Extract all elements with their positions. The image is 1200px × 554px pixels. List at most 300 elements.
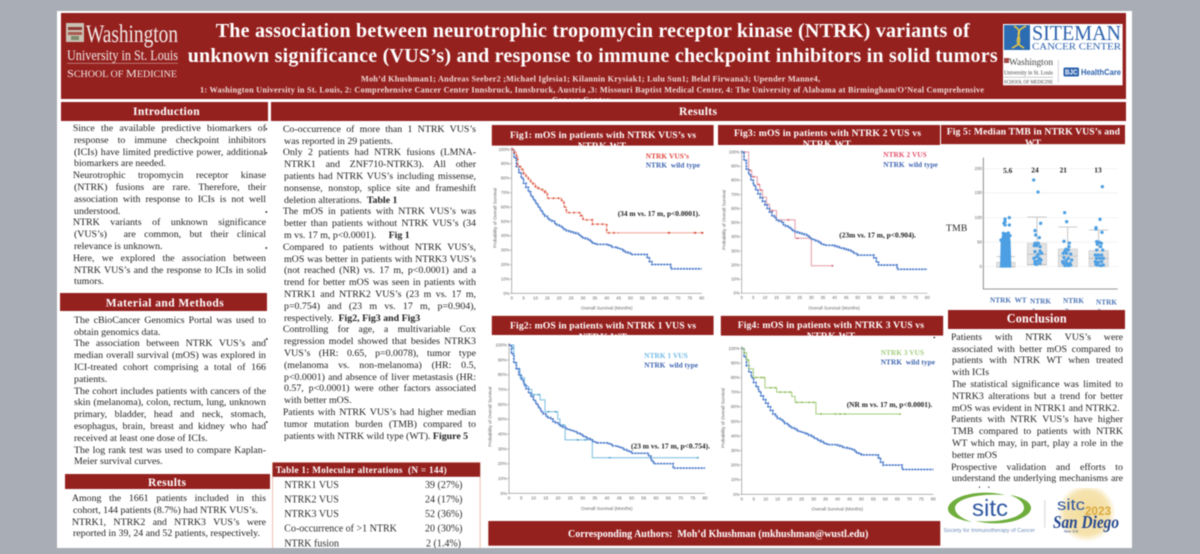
legend: Fig 1: NTRK VUS’s [646, 152, 689, 160]
text block: results detail: Controlling for age, a multivariable Cox [283, 324, 476, 335]
chart: Kaplan-Meier Fig 1: 70% [501, 190, 510, 195]
logo: Siteman Cancer Center: University in St. Louis [1004, 70, 1053, 76]
text block: conclusion: WT which may, in part, play a role in the [952, 438, 1123, 449]
logo: Washington University School of Medicine: SCHOOL OF MEDICINE [67, 68, 178, 80]
text block: introduction: relevance is unknown. [74, 241, 163, 252]
chart: Kaplan-Meier Fig 2: 45 [617, 496, 622, 500]
text block: results detail: was reported in 29 patients. [284, 136, 393, 147]
heading: Fig 3: Fig3: mOS in patients with NTRK 2 VUS vs [734, 128, 921, 139]
text block: conclusion: understand the underlying mechanisms are [952, 473, 1123, 484]
chart: Kaplan-Meier Fig 3: 45 [844, 295, 849, 300]
text block: introduction: Neurotrophic tropomycin receptor kinase [73, 170, 266, 181]
chart: Kaplan-Meier Fig 2: 50 [629, 496, 635, 500]
chart: Kaplan-Meier Fig 2: 10% [498, 476, 507, 481]
text block: introduction: Since the available predictive biomarkers of [73, 123, 266, 134]
authors and affiliations: Moh’d Khushman1; Andreas Seeber2 ;Michael Iglesia1; Kilannin Krysiak1; Lulu Sun1; Belal Firwana3; Upender Manne4, [361, 75, 820, 84]
legend: Fig 2: NTRK 1 VUS [644, 351, 688, 360]
category labels [990, 296, 1117, 316]
logo: Siteman Cancer Center: HealthCare [1081, 67, 1121, 77]
box plots [997, 243, 1108, 267]
heading: Fig 1: Fig1: mOS in patients with NTRK VUS’s vs [510, 130, 696, 141]
text block: introduction: understood. [74, 206, 120, 217]
heading: Results (main): Results [679, 105, 717, 118]
text block: results detail: Compared to patients without NTRK VUS’s, [283, 242, 476, 253]
text block: results detail: NTRK1 and ZNF710-NTRK3). All other [284, 159, 476, 170]
chart: Kaplan-Meier Fig 4: 0% [733, 492, 740, 497]
chart: TMB box plot: 200 [975, 166, 983, 171]
chart: Kaplan-Meier Fig 2: Overall Survival (Months) [581, 506, 633, 511]
chart: Kaplan-Meier Fig 2: 40% [498, 432, 507, 437]
logo: SITC 2023 San Diego: sitc [1057, 497, 1085, 514]
logo: Washington University School of Medicine: University in St. Louis [67, 48, 178, 64]
text block: introduction: (ICIs) have limited predictive power, additional [74, 147, 266, 158]
annotation: Fig 4 result: (NR m vs. 17 m, p<0.0001). [847, 400, 932, 409]
chart: Kaplan-Meier Fig 4: 80% [731, 375, 740, 380]
table: molecular alterations: NTRK1 VUS [284, 480, 339, 491]
header banner [60, 12, 1127, 100]
chart: Kaplan-Meier Fig 4: 15 [775, 496, 781, 501]
panel: Fig 4 [720, 315, 944, 512]
heading: Introduction [60, 101, 269, 122]
logo: SITC society [944, 493, 1035, 534]
text block: introduction: biomarkers are needed. [74, 158, 166, 169]
chart: Kaplan-Meier Fig 1: 60 [652, 295, 657, 300]
median values: 24 [1031, 166, 1039, 174]
chart: Kaplan-Meier Fig 1: 10 [533, 295, 538, 300]
logo: Siteman Cancer Center: SITEMAN [1032, 21, 1121, 45]
chart: Kaplan-Meier Fig 3: 80% [731, 178, 740, 183]
title: unknown significance (VUS’s) and response to immune checkpoint inhibitors in solid tumors [188, 45, 998, 67]
text block: introduction: response to immune checkpoint inhibitors [74, 135, 266, 146]
chart: Kaplan-Meier Fig 3: 25 [797, 295, 803, 300]
text block: introduction: Here, we explored the association between [73, 253, 266, 264]
chart: Kaplan-Meier Fig 2: 70% [498, 387, 507, 392]
chart: Kaplan-Meier Fig 1: 80 [699, 295, 705, 300]
banner: corresponding authors [488, 520, 942, 546]
chart: Kaplan-Meier Fig 1: Overall Survival (Months) [581, 306, 633, 310]
chart: Kaplan-Meier Fig 1: Probability of Overall Survival [492, 188, 498, 248]
chart: Kaplan-Meier Fig 3: 75 [913, 295, 919, 300]
category labels: NTRK WT [990, 296, 1027, 304]
chart: TMB box plot: 100 [975, 215, 983, 220]
text block: conclusion: Patients with NTRK VUS’s have higher [952, 414, 1123, 425]
heading: Conclusion: Conclusion [1007, 312, 1067, 326]
chart: Kaplan-Meier Fig 4: 55 [871, 496, 876, 501]
chart: Kaplan-Meier Fig 1: 0% [503, 291, 510, 296]
chart: Kaplan-Meier Fig 4: 50 [859, 496, 864, 501]
chart: Kaplan-Meier Fig 2: 40 [605, 496, 610, 500]
text block: results detail: regression model showed that besides NTRK3 [284, 336, 476, 347]
heading: Conclusion [947, 309, 1126, 330]
panel: Fig 1 [491, 124, 714, 311]
table: molecular alterations: 39 (27%) [425, 480, 462, 491]
chart: Kaplan-Meier Fig 3: 10 [763, 295, 768, 300]
chart: Kaplan-Meier Fig 2: 0% [500, 491, 507, 496]
text block: conclusion: with ICIs [952, 367, 989, 378]
chart: Kaplan-Meier Fig 4: 40% [731, 433, 740, 438]
chart: Kaplan-Meier Fig 3: 60% [731, 206, 740, 211]
text block: results detail: NTRK1 and NTRK2 VUS’s (23 m vs. 17 m, [284, 289, 476, 300]
text block: results detail: better than patients without NTRK VUS’s (34 [284, 218, 476, 229]
panel: Fig 5 [940, 124, 1126, 315]
title [188, 20, 998, 67]
heading: Results (left column): Results [148, 476, 186, 489]
chart: Kaplan-Meier Fig 2: 25 [568, 496, 573, 500]
chart: Kaplan-Meier Fig 4 [720, 337, 936, 512]
chart: Kaplan-Meier Fig 1: 35 [592, 295, 598, 300]
table: molecular alterations: NTRK2 VUS [284, 495, 339, 506]
text block: results detail: patients had NTRK VUS’s including missense, [284, 171, 476, 182]
heading: Fig 4 [721, 316, 943, 342]
chart: Kaplan-Meier Fig 2: 65 [666, 496, 671, 500]
category labels: NTRK [1096, 298, 1117, 306]
text block: results detail: respectively. Fig2, Fig3 and Fig3 [284, 313, 420, 324]
chart: TMB box plot: 50 [977, 240, 983, 244]
text block: material and methods: primary, bladder, head and neck, stomach, [74, 409, 266, 420]
chart: Kaplan-Meier Fig 4: 5 [752, 496, 755, 501]
text block: conclusion: Patients with NTRK VUS’s were [952, 332, 1123, 343]
chart: Kaplan-Meier Fig 4: 70 [907, 496, 912, 501]
chart: Kaplan-Meier Fig 4: Probability of Overall Survival [720, 388, 726, 448]
authors and affiliations [200, 75, 984, 104]
text block: results detail: (not reached (NR) vs. 17 m, p<0.0001) and a [284, 265, 476, 276]
chart: Kaplan-Meier Fig 2: 30% [498, 446, 507, 451]
chart: Kaplan-Meier Fig 1: 80% [501, 176, 510, 181]
banner: corresponding authors: Corresponding Authors: Moh’d Khushman (mkhushman@wustl.edu) [568, 529, 868, 540]
text block: material and methods: esophagus, brain, breast and kidney who had [74, 421, 266, 432]
text block: results detail: trend for better mOS was seen in patients with [284, 277, 476, 288]
stray bullets between columns [264, 128, 268, 424]
text block: results detail: patients with NTRK wild type (WT). Figure 5 [284, 431, 468, 442]
chart: Kaplan-Meier Fig 3: Overall Survival (Months) [808, 306, 860, 310]
chart: Kaplan-Meier Fig 3: 50 [855, 295, 861, 300]
chart: Kaplan-Meier Fig 1 [492, 147, 705, 310]
text block: results detail: (melanoma vs. non-melanoma) (HR: 0.5, [284, 360, 476, 371]
text block: conclusion: The statistical significance was limited to [952, 379, 1123, 390]
logo: SITC society: sitc [972, 495, 1008, 521]
chart: Kaplan-Meier Fig 3: 0% [734, 291, 740, 296]
text block: conclusion: associated with better mOS compared to [952, 344, 1123, 355]
text block: introduction: NTRK VUS’s and the response to ICIs in solid [74, 265, 266, 276]
heading: Material and Methods: Material and Methods [106, 297, 224, 309]
chart: Kaplan-Meier Fig 3: 60 [879, 295, 884, 300]
table: molecular alterations: 52 (36%) [425, 509, 462, 520]
chart: Kaplan-Meier Fig 4: 30% [731, 448, 740, 453]
heading: Fig 5: WT [1025, 138, 1042, 149]
chart: Kaplan-Meier Fig 2: 20 [556, 496, 561, 500]
chart: Kaplan-Meier Fig 1: 20% [501, 262, 510, 267]
chart: Kaplan-Meier Fig 2: 55 [641, 496, 647, 500]
text block: results detail: Co-occurrence of more than 1 NTRK VUS’s [283, 124, 476, 135]
text block: conclusion: NTRK3 alterations but a trend for better [952, 391, 1123, 402]
logo: Siteman Cancer Center: SCHOOL OF MEDICINE [1004, 80, 1053, 86]
text block: material and methods: ICI-treated cohort comprising a total of 166 [74, 362, 266, 373]
heading: Fig 5: Fig 5: Median TMB in NTRK VUS’s and [947, 127, 1121, 138]
chart: Kaplan-Meier Fig 3: 90% [731, 164, 740, 169]
chart: Kaplan-Meier Fig 2: 30 [580, 496, 586, 500]
text block: material and methods: patients. [74, 374, 107, 385]
chart: Kaplan-Meier Fig 4: 60 [883, 496, 888, 501]
chart: Kaplan-Meier Fig 4: 25 [799, 496, 805, 501]
heading: Results (main) [270, 101, 1127, 122]
chart: Kaplan-Meier Fig 1: 0 [510, 295, 513, 300]
legend: Fig 3: NTRK 2 VUS [883, 150, 927, 159]
legend: Fig 4: NTRK wild type [881, 358, 936, 366]
chart: Kaplan-Meier Fig 2: 100% [495, 343, 507, 348]
chart: TMB box plot: 150 [975, 190, 983, 195]
chart: Kaplan-Meier Fig 3: 10% [731, 277, 740, 282]
chart: Kaplan-Meier Fig 4: 0 [740, 496, 743, 501]
text block: results detail: nonsense, nonstop, splice site and frameshift [284, 183, 476, 194]
chart: Kaplan-Meier Fig 3: 80 [925, 295, 930, 300]
logo: SITC 2023 San Diego: San Diego [1053, 512, 1119, 532]
chart: Kaplan-Meier Fig 4: 75 [919, 496, 924, 501]
heading: Fig 3: NTRK WT [803, 139, 851, 150]
chart: Kaplan-Meier Fig 4: 10% [731, 477, 740, 482]
text block: results detail: The mOS in patients with NTRK VUS’s was [283, 206, 476, 217]
text block: material and methods: The log rank test was used to compare Kaplan- [74, 445, 266, 456]
chart: Kaplan-Meier Fig 1: 60% [501, 204, 510, 209]
legend: Fig 3 [883, 150, 938, 169]
chart: Kaplan-Meier Fig 2: 90% [498, 357, 507, 362]
legend: Fig 2: NTRK wild type [644, 360, 699, 370]
logo: SITC 2023 San Diego: Nov 3-5 [1064, 528, 1079, 534]
chart: Kaplan-Meier Fig 3: 20% [731, 262, 740, 267]
text block: results detail: p=0.754) and (23 m vs. 17 m, p=0.904), [284, 301, 476, 312]
chart: Kaplan-Meier Fig 2: 0 [508, 496, 511, 500]
chart: Kaplan-Meier Fig 3 [722, 149, 938, 310]
annotation: Fig 1 result: (34 m vs. 17 m, p<0.0001). [618, 209, 700, 218]
chart: Kaplan-Meier Fig 2: 5 [520, 496, 523, 500]
text block: conclusion [951, 332, 1124, 489]
heading: Fig 1: NTRK WT [578, 141, 626, 152]
chart: Kaplan-Meier Fig 1: 40% [501, 233, 510, 238]
text block: results detail: Patients with NTRK VUS’s had higher median [283, 407, 476, 418]
table: molecular alterations [272, 462, 482, 548]
chart: Kaplan-Meier Fig 4: 35 [823, 496, 828, 501]
heading: Material and Methods [59, 292, 268, 312]
text block: introduction: tumors. [74, 276, 104, 287]
table: molecular alterations: NTRK3 VUS [284, 509, 339, 520]
chart: Kaplan-Meier Fig 3: 30% [731, 248, 740, 253]
heading: Fig 2 [492, 316, 714, 343]
text block: introduction: NTRK variants of unknown significance [73, 217, 266, 228]
text block: introduction: association with response to ICIs is not well [74, 194, 266, 205]
text block: introduction [72, 123, 267, 287]
chart: Kaplan-Meier Fig 3: 100% [729, 149, 740, 154]
chart: Kaplan-Meier Fig 4: 70% [731, 390, 740, 395]
heading: Fig 4: Fig4: mOS in patients with NTRK 3 VUS vs [738, 320, 924, 331]
chart: Kaplan-Meier Fig 1: 5 [522, 295, 525, 300]
median values: 13 [1094, 166, 1102, 174]
text block: material and methods: The association between NTRK VUS’s and [74, 338, 266, 349]
text block: material and methods: skin (melanoma), colon, rectum, lung, unknown [74, 397, 266, 408]
text block: results detail: deletion alterations. Table 1 [284, 195, 397, 206]
chart: TMB box plot [946, 158, 1118, 316]
text block: conclusion: mOS was evident in NTRK1 and NTRK2. [952, 403, 1120, 414]
legend: Fig 4: NTRK 3 VUS [881, 348, 924, 357]
chart: Kaplan-Meier Fig 3: 5 [752, 295, 755, 300]
chart: Kaplan-Meier Fig 4: 30 [811, 496, 817, 501]
chart: Kaplan-Meier Fig 1: 90% [501, 161, 510, 166]
chart: Kaplan-Meier Fig 1: 45 [616, 295, 622, 300]
table: molecular alterations: 20 (30%) [425, 524, 462, 535]
chart: Kaplan-Meier Fig 3: 40% [731, 234, 740, 239]
text block: material and methods: Meier survival curves. [74, 456, 163, 467]
text block: results detail: tumor mutation burden (TMB) compared to [284, 419, 476, 430]
chart: Kaplan-Meier Fig 4: 50% [731, 419, 740, 424]
authors and affiliations: 1: Washington University in St. Louis, 2: Comprehensive Cancer Center Innsbruck, Innsbruck, Austria ,3: Missouri Baptist Medical Center, 4: The University of Alabama at Birmingham/O’Neal Comprehensive [200, 86, 984, 95]
axis label: TMB: TMB [946, 223, 967, 234]
chart: Kaplan-Meier Fig 3: 55 [867, 295, 872, 300]
text block: results summary [72, 493, 266, 539]
table: molecular alterations: Table 1: Molecular alterations (N = 144) [276, 465, 447, 475]
category labels: NTRK [1063, 297, 1084, 305]
chart: Kaplan-Meier Fig 2: 60% [498, 402, 507, 407]
text block: introduction: (VUS’s) are common, but their clinical [74, 229, 266, 240]
chart: Kaplan-Meier Fig 2: 70 [678, 496, 684, 500]
chart: Kaplan-Meier Fig 1: 15 [545, 295, 550, 300]
text block: results detail [282, 124, 477, 442]
chart: Kaplan-Meier Fig 4: Overall Survival (Months) [812, 506, 864, 512]
chart: Kaplan-Meier Fig 1: 20 [557, 295, 562, 300]
chart: Kaplan-Meier Fig 3: 30 [809, 295, 814, 300]
chart: Kaplan-Meier Fig 2: 80% [498, 372, 507, 377]
logo: SITC 2023 San Diego [1053, 484, 1119, 542]
legend: Fig 4 [881, 348, 936, 366]
logo: Siteman Cancer Center: BJC [1065, 70, 1078, 77]
logo: SITC 2023 San Diego: 2023 [1085, 506, 1111, 518]
chart: Kaplan-Meier Fig 3: 50% [731, 220, 740, 225]
chart: Kaplan-Meier Fig 4: 20% [731, 463, 740, 468]
annotation: Fig 2 result: (23 m vs. 17 m, p<0.754). [631, 442, 710, 450]
heading: Fig 3 [718, 125, 940, 150]
chart: Kaplan-Meier Fig 3: 70 [902, 295, 907, 300]
chart: Kaplan-Meier Fig 3: Probability of Overall Survival [722, 190, 726, 250]
text block: results summary: Among the 1661 patients included in this [72, 493, 266, 504]
text block: results detail: Only 2 patients had NTRK fusions (LMNA- [283, 147, 476, 158]
text block: material and methods: The cBioCancer Genomics Portal was used to [74, 315, 266, 326]
text block: results summary: NTRK1, NTRK2 and NTRK3 VUS’s were [72, 517, 266, 528]
chart: Kaplan-Meier Fig 1: 50% [501, 219, 510, 224]
text block: results summary: cohort, 144 patients (8.7%) had NTRK VUS’s. [73, 505, 258, 516]
logo: Siteman Cancer Center: Washington [1009, 57, 1054, 67]
chart: Kaplan-Meier Fig 1: 25 [569, 295, 574, 300]
category labels: NTRK [1030, 298, 1051, 306]
chart: Kaplan-Meier Fig 3: 40 [832, 295, 838, 300]
annotation: Fig 3 result: (23m vs. 17 m, p<0.904). [839, 230, 916, 240]
legend: Fig 3: NTRK wild type [883, 160, 938, 169]
text block: introduction: (NTRK) fusions are rare. Therefore, their [74, 182, 266, 193]
panel: Fig 2 [488, 315, 714, 512]
text block: results detail: with better mOS. [284, 395, 352, 406]
chart: Kaplan-Meier Fig 3: 35 [821, 295, 826, 300]
logos: SITC [943, 488, 1120, 542]
table: molecular alterations: Co-occurrence of >1 NTRK [284, 524, 398, 535]
chart: Kaplan-Meier Fig 4: 100% [728, 346, 740, 351]
legend: Fig 1 [646, 152, 701, 170]
text block: results detail: mOS was better in patients with NTRK3 VUS’s [284, 254, 476, 265]
text block: conclusion: better mOS [952, 450, 997, 461]
chart: Kaplan-Meier Fig 4: 45 [847, 496, 852, 501]
text block: conclusion: TMB compared to patients with NTRK [952, 426, 1123, 437]
chart: Kaplan-Meier Fig 1: 50 [628, 295, 633, 300]
text block: results detail: m vs. 17 m, p<0.0001). Fig 1 [284, 230, 410, 241]
chart: Kaplan-Meier Fig 4: 40 [835, 496, 840, 501]
chart: Kaplan-Meier Fig 1: 40 [604, 295, 610, 300]
chart: Kaplan-Meier Fig 3: 20 [786, 295, 791, 300]
text block: material and methods: obtain genomics data. [74, 327, 160, 338]
text block: material and methods: median overall survival (mOS) was explored in [74, 350, 266, 361]
chart: Kaplan-Meier Fig 1: 65 [664, 295, 669, 300]
chart: Kaplan-Meier Fig 4: 60% [731, 404, 740, 409]
bottom backdrop edge [0, 548, 1200, 554]
text block: material and methods: The cohort includes patients with cancers of the [74, 386, 266, 397]
legend: Fig 2 [644, 351, 699, 370]
logo: Washington University School of Medicine: Washington [86, 21, 178, 48]
median values: 5.6 [1003, 166, 1013, 175]
chart: Kaplan-Meier Fig 3: 15 [774, 295, 779, 300]
chart: Kaplan-Meier Fig 4: 20 [787, 496, 793, 501]
chart: Kaplan-Meier Fig 1: 100% [498, 147, 510, 152]
heading: Fig 2: Fig2: mOS in patients with NTRK 1 VUS vs [510, 321, 696, 332]
legend: Fig 1: NTRK wild type [646, 160, 701, 170]
chart: Kaplan-Meier Fig 1: 70 [676, 295, 681, 300]
chart: Kaplan-Meier Fig 2: 15 [543, 496, 549, 500]
chart: Kaplan-Meier Fig 2: 80 [703, 496, 708, 500]
chart: Kaplan-Meier Fig 2: 50% [498, 417, 507, 422]
chart: Kaplan-Meier Fig 4: 80 [931, 496, 936, 501]
chart: TMB box plot: 0 [980, 264, 983, 269]
table: molecular alterations: 24 (17%) [425, 495, 462, 506]
logo: Washington University School of Medicine [66, 21, 178, 80]
chart: Kaplan-Meier Fig 2: 75 [690, 496, 696, 500]
median values: 21 [1060, 166, 1067, 174]
text block: results summary: reported in 39, 24 and 52 patients, respectively. [73, 528, 260, 539]
text block: material and methods [73, 315, 266, 467]
panel: Fig 3 [717, 124, 941, 311]
logo: Siteman Cancer Center: CANCER CENTER [1032, 42, 1121, 52]
heading: Fig 1 [492, 125, 714, 152]
chart: Kaplan-Meier Fig 4: 90% [731, 360, 740, 365]
text block: results detail: VUS’s (HR: 0.65, p=0.0078), tumor type [284, 348, 476, 359]
chart: Kaplan-Meier Fig 1: 30 [581, 295, 586, 300]
chart: Kaplan-Meier Fig 2: 60 [654, 496, 659, 500]
heading: Fig 4: NTRK WT [807, 331, 855, 342]
chart: Kaplan-Meier Fig 2 [488, 343, 710, 511]
heading: Introduction: Introduction [133, 105, 200, 118]
chart: Kaplan-Meier Fig 2: 10 [531, 496, 537, 500]
text block: conclusion: Prospective validation and efforts to [952, 462, 1123, 473]
chart: Kaplan-Meier Fig 3: 65 [890, 295, 896, 300]
chart: Kaplan-Meier Fig 2: 35 [592, 496, 598, 500]
heading: Fig 2: NTRK WT [579, 332, 627, 343]
chart: Kaplan-Meier Fig 1: 75 [687, 295, 693, 300]
text block: results detail: 0.57, p<0.0001) were other factors associated [284, 383, 476, 394]
text block: material and methods: received at least one dose of ICIs. [74, 433, 208, 444]
text block: conclusion: patients with NTRK WT when treated [952, 355, 1123, 366]
heading: Results (left column) [64, 473, 271, 490]
median values [1003, 166, 1102, 175]
text block: results detail: p<0.0001) and absence of liver metastasis (HR: [284, 372, 476, 383]
heading: Fig 5 [941, 125, 1125, 149]
chart: Kaplan-Meier Fig 4: 65 [895, 496, 900, 501]
chart: Kaplan-Meier Fig 4: 10 [763, 496, 769, 501]
title: The association between neurotrophic tropomycin receptor kinase (NTRK) variants of [216, 20, 970, 42]
chart: Kaplan-Meier Fig 3: 70% [731, 192, 740, 197]
chart: Kaplan-Meier Fig 1: 10% [501, 276, 510, 281]
chart: Kaplan-Meier Fig 1: 30% [501, 248, 510, 253]
